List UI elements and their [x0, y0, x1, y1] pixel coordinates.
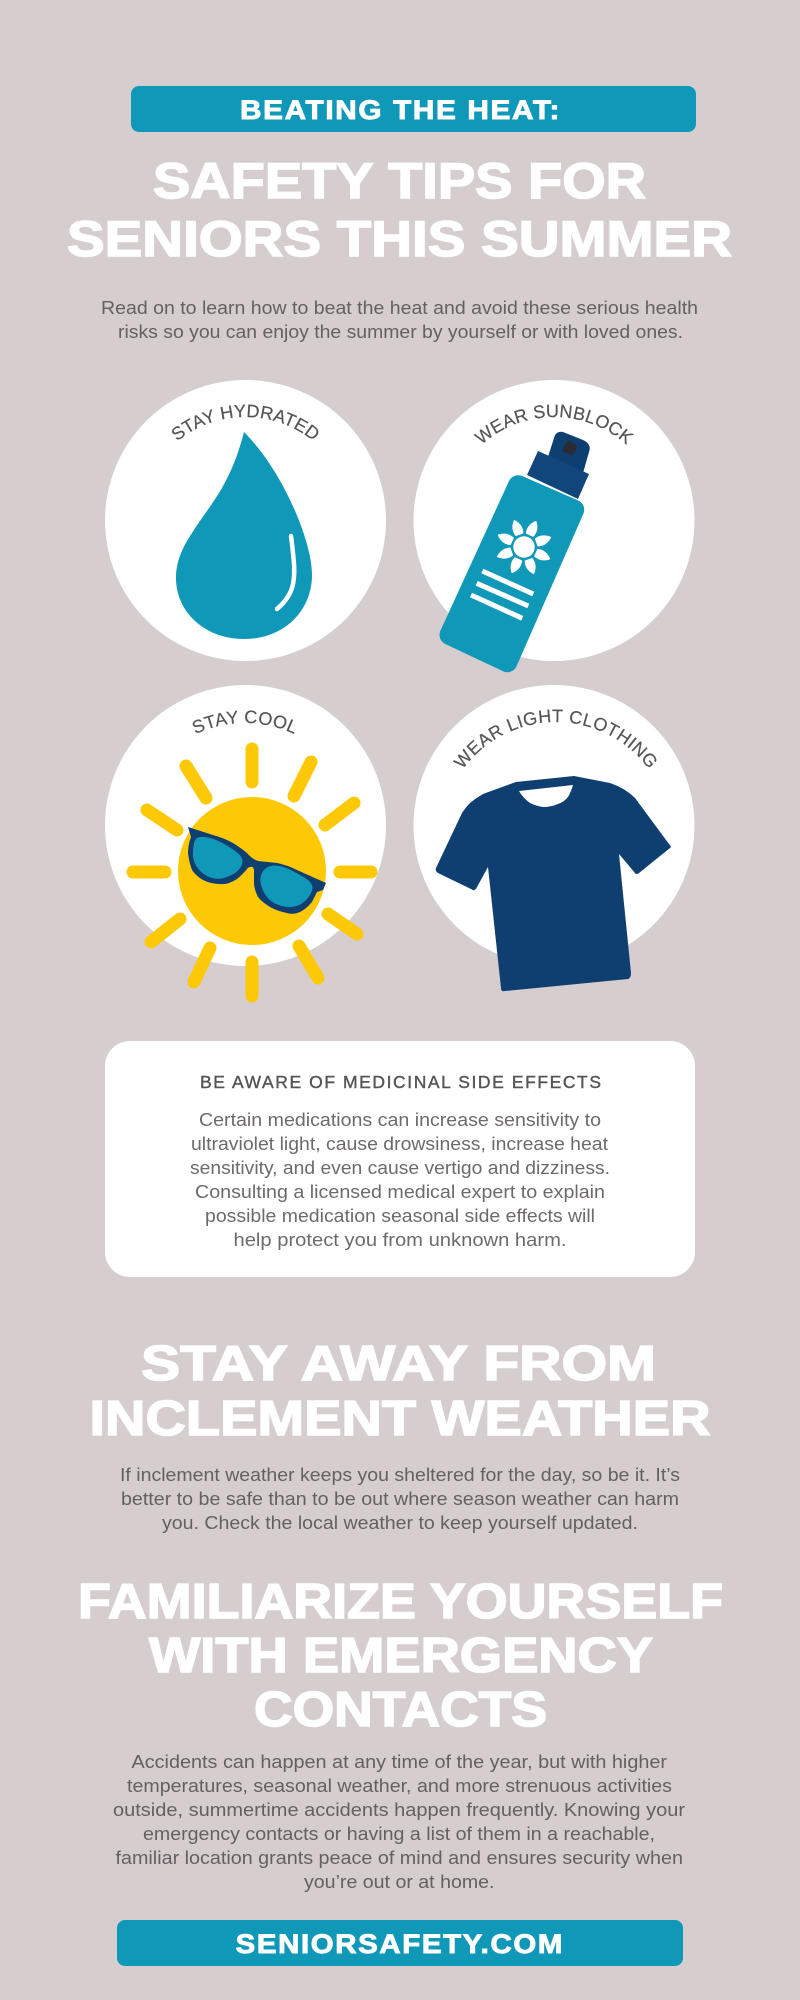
heading: stay away from inclement weather: [90, 1337, 710, 1446]
top banner: Beating the Heat: BEATING THE HEAT:: [240, 95, 561, 125]
panel: wear sunblock: [414, 380, 694, 672]
icon: t-shirt: [436, 776, 671, 991]
icon: sunblock spray bottle: [450, 432, 590, 662]
label: stay hydrated: STAY HYDRATED: [172, 404, 318, 440]
text: emergency contacts: [113, 1751, 685, 1892]
card body text: possible medication seasonal side effects will: [205, 1205, 595, 1226]
label: wear sunblock: WEAR SUNBLOCK: [474, 404, 634, 445]
panel: stay hydrated: [105, 380, 386, 661]
title: [67, 153, 732, 267]
heading: emergency contacts: WITH EMERGENCY: [149, 1629, 653, 1683]
heading: emergency contacts: CONTACTS: [254, 1683, 547, 1737]
text: emergency contacts: you’re out or at home.: [304, 1871, 494, 1892]
card body text: help protect you from unknown harm.: [234, 1229, 566, 1250]
heading: emergency contacts: [78, 1575, 723, 1737]
heading: stay away from inclement weather: STAY AWAY FROM: [141, 1337, 656, 1391]
text: inclement weather: [120, 1464, 680, 1533]
text: inclement weather: If inclement weather keeps you sheltered for the day, so be it. It’s: [120, 1464, 680, 1485]
icon: water drop: [176, 432, 312, 639]
top banner: Beating the Heat: [131, 86, 696, 132]
footer banner: website: SENIORSAFETY.COM: [236, 1929, 564, 1959]
text: emergency contacts: emergency contacts or having a list of them in a reachable,: [143, 1823, 655, 1844]
text: emergency contacts: familiar location grants peace of mind and ensures security when: [116, 1847, 683, 1868]
card body text: sensitivity, and even cause vertigo and dizziness.: [190, 1157, 610, 1178]
panel: medicinal side effects: [105, 1041, 695, 1277]
card heading: BE AWARE OF MEDICINAL SIDE EFFECTS: [200, 1072, 601, 1092]
card body text: Consulting a licensed medical expert to explain: [195, 1181, 605, 1202]
title: SAFETY TIPS FOR: [153, 153, 646, 209]
title: SENIORS THIS SUMMER: [67, 211, 732, 267]
card body text: Certain medications can increase sensitivity to: [199, 1109, 601, 1130]
heading: stay away from inclement weather: INCLEMENT WEATHER: [90, 1392, 710, 1446]
intro text: risks so you can enjoy the summer by yourself or with loved ones.: [118, 321, 683, 342]
heading: emergency contacts: FAMILIARIZE YOURSELF: [78, 1575, 723, 1629]
panel: wear light clothing: [414, 685, 694, 992]
text: emergency contacts: temperatures, seasonal weather, and more strenuous activities: [127, 1775, 672, 1796]
card body text: ultraviolet light, cause drowsiness, increase heat: [191, 1133, 608, 1154]
text: inclement weather: you. Check the local weather to keep yourself updated.: [162, 1512, 638, 1533]
label: wear light clothing: WEAR LIGHT CLOTHING: [452, 710, 656, 768]
text: emergency contacts: outside, summertime accidents happen frequently. Knowing your: [113, 1799, 685, 1820]
panel: stay cool: [105, 685, 386, 1002]
footer banner: website: [117, 1920, 683, 1966]
text: emergency contacts: Accidents can happen at any time of the year, but with higher: [132, 1751, 667, 1772]
intro text: Read on to learn how to beat the heat and avoid these serious health: [101, 297, 698, 318]
label: stay cool: STAY COOL: [192, 710, 294, 734]
card body text: [190, 1109, 610, 1250]
icon: sun with sunglasses: [133, 749, 371, 996]
text: inclement weather: better to be safe than to be out where season weather can harm: [121, 1488, 679, 1509]
intro text: [101, 297, 698, 342]
